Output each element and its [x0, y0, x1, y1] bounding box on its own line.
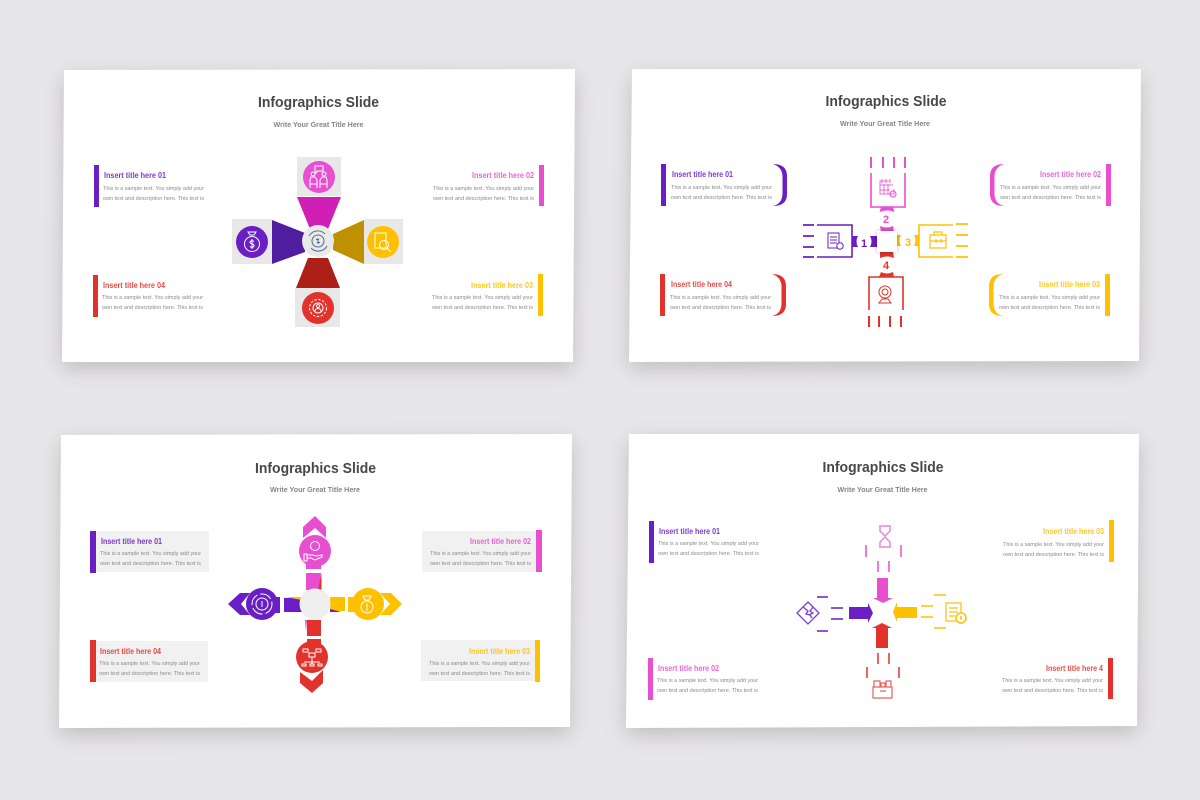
text block: slide 4 item 03: own text and description here. This text is [1003, 552, 1104, 558]
title: slide 4: Infographics Slide [822, 459, 944, 476]
panel: slide 4 bottom right [626, 434, 1139, 728]
text block: slide 2 item 04: Insert title here 04 [671, 279, 732, 289]
diagram: slide 4 converging arrows [797, 526, 966, 698]
text block: slide 2 item 02 [990, 164, 1111, 206]
text block: slide 1 item 01: Insert title here 01 [104, 170, 166, 180]
text block: slide 3 item 01: own text and description here. This text is [100, 561, 201, 567]
text block: slide 3 item 04: Insert title here 04 [100, 646, 161, 656]
text block: slide 3 item 04: This is a sample text. You simply add your [99, 661, 200, 667]
panel: slide 2 top right [629, 69, 1141, 362]
text block: slide 4 item 4: own text and description here. This text is [1002, 688, 1103, 694]
text block: slide 1 item 04 [93, 275, 203, 317]
text block: slide 2 item 01: This is a sample text. You simply add your [671, 185, 772, 191]
box 3 yellow [895, 224, 968, 257]
diagram: slide 2 numbered boxes [803, 157, 968, 327]
center square [877, 231, 897, 252]
text block: slide 4 item 02: own text and description here. This text is [657, 688, 758, 694]
dashes and document icon: yellow [921, 595, 966, 628]
text block: slide 4 item 01 [649, 521, 759, 563]
title: slide 2: Infographics Slide [826, 93, 946, 110]
text block: slide 4 item 02: This is a sample text. You simply add your [657, 678, 758, 684]
text block: slide 3 item 02: own text and description here. This text is [430, 561, 531, 567]
text block: slide 2 item 03: Insert title here 03 [1039, 279, 1100, 289]
box 1 purple: 1 [861, 238, 867, 250]
icon: people [303, 161, 335, 193]
text block: slide 2 item 01: Insert title here 01 [672, 169, 733, 179]
text block: slide 1 item 02: This is a sample text. You simply add your [433, 186, 534, 192]
icon: document search [367, 226, 399, 258]
dashes and hourglass icon: pink [866, 526, 901, 572]
text block: slide 1 item 01: This is a sample text. You simply add your [103, 186, 204, 192]
text block: slide 1 item 03: own text and description here. This text is [432, 305, 533, 311]
box 3 yellow: 3 [905, 237, 911, 249]
text block: slide 4 item 4: Insert title here 4 [1046, 663, 1103, 673]
text block: slide 2 item 03: own text and description here. This text is [999, 305, 1100, 311]
text block: slide 2 item 02: Insert title here 02 [1040, 169, 1101, 179]
panel: slide 3 bottom left [59, 434, 572, 728]
dashes and toolbox icon: red [867, 653, 899, 698]
text block: slide 1 item 01: own text and description here. This text is [103, 196, 204, 202]
text block: slide 2 item 01: own text and description here. This text is [671, 195, 772, 201]
text block: slide 3 item 03: Insert title here 03 [469, 646, 530, 656]
subtitle: slide 4: Write Your Great Title Here [838, 485, 928, 494]
text block: slide 4 item 03 [1003, 520, 1114, 562]
arrow: purple right [849, 603, 873, 623]
arrow arm: right yellow [330, 588, 402, 620]
text block: slide 2 item 02: own text and description here. This text is [1000, 195, 1101, 201]
icon: money bag [236, 226, 268, 258]
subtitle: slide 3: Write Your Great Title Here [270, 485, 360, 494]
text block: slide 1 item 02: Insert title here 02 [472, 170, 534, 180]
text block: slide 4 item 4: This is a sample text. You simply add your [1002, 678, 1103, 684]
subtitle: slide 2: Write Your Great Title Here [840, 119, 930, 128]
text block: slide 3 item 01: Insert title here 01 [101, 536, 162, 546]
arrow arm: top pink [299, 516, 331, 590]
arrow arm: left purple [228, 588, 303, 620]
text block: slide 3 item 04: own text and description here. This text is [99, 671, 200, 677]
text block: slide 1 item 03: Insert title here 03 [471, 280, 533, 290]
text block: slide 3 item 02 [422, 530, 542, 572]
text block: slide 3 item 03: own text and description here. This text is [429, 671, 530, 677]
text block: slide 4 item 01: own text and description here. This text is [658, 551, 759, 557]
arrow arm: bottom red [296, 620, 328, 693]
text block: slide 4 item 02 [648, 658, 758, 700]
text block: slide 2 item 02: This is a sample text. You simply add your [1000, 185, 1101, 191]
text block: slide 3 item 02: This is a sample text. You simply add your [430, 551, 531, 557]
panel: slide 1 top left [62, 69, 575, 362]
title: slide 3: Infographics Slide [255, 460, 376, 477]
diagram: slide 1 cross of trapezoids [232, 157, 403, 327]
box 1 purple [803, 225, 877, 257]
text block: slide 1 item 04: own text and description here. This text is [102, 305, 203, 311]
icon: center cycle [309, 231, 327, 251]
diagram: slide 3 cross with chevrons [228, 516, 402, 693]
text block: slide 4 item 03: This is a sample text. You simply add your [1003, 542, 1104, 548]
center circle [300, 588, 330, 620]
text block: slide 1 item 03 [432, 274, 543, 316]
text block: slide 2 item 01 [661, 164, 787, 206]
text block: slide 2 item 04: This is a sample text. You simply add your [670, 295, 771, 301]
box 4 red [869, 252, 903, 327]
box 2 pink: 2 [883, 214, 889, 226]
box 4 red: 4 [883, 260, 890, 272]
text block: slide 4 item 01: This is a sample text. You simply add your [658, 541, 759, 547]
text block: slide 3 item 01: This is a sample text. You simply add your [100, 551, 201, 557]
text block: slide 1 item 02 [433, 165, 544, 206]
text block: slide 2 item 04: own text and description here. This text is [670, 305, 771, 311]
text block: slide 2 item 03: This is a sample text. You simply add your [999, 295, 1100, 301]
text block: slide 3 item 01 [90, 531, 209, 573]
text block: slide 1 item 02: own text and description here. This text is [433, 196, 534, 202]
dashes and puzzle icon: purple [797, 597, 843, 631]
text block: slide 3 item 04 [90, 640, 208, 682]
text block: slide 2 item 03 [989, 274, 1110, 316]
text block: slide 4 item 4 [1002, 658, 1113, 699]
arrow: red up [872, 623, 892, 648]
text block: slide 1 item 04: This is a sample text. You simply add your [102, 295, 203, 301]
text block: slide 4 item 02: Insert title here 02 [658, 663, 719, 673]
text block: slide 1 item 01 [94, 165, 204, 207]
text block: slide 4 item 03: Insert title here 03 [1043, 526, 1104, 536]
icon: gear [302, 292, 334, 324]
arrow: yellow left [893, 602, 917, 622]
text block: slide 3 item 03: This is a sample text. You simply add your [429, 661, 530, 667]
text block: slide 3 item 02: Insert title here 02 [470, 536, 531, 546]
subtitle: slide 1: Write Your Great Title Here [274, 120, 364, 129]
text block: slide 1 item 04: Insert title here 04 [103, 280, 165, 290]
text block: slide 2 item 04 [660, 274, 786, 316]
text block: slide 1 item 03: This is a sample text. You simply add your [432, 295, 533, 301]
text block: slide 4 item 01: Insert title here 01 [659, 526, 720, 536]
arrow: pink down [873, 578, 893, 603]
text block: slide 3 item 03 [421, 640, 540, 682]
title: slide 1: Infographics Slide [258, 94, 379, 111]
box 2 pink [871, 157, 905, 232]
